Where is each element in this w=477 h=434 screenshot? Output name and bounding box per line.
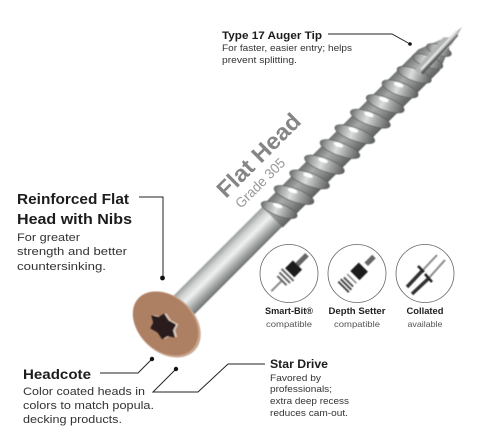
badge: Collated available [396, 244, 454, 329]
caption [265, 306, 313, 329]
rotated label: Flat Head: Flat Head [211, 108, 306, 203]
callout: Star Drive: professionals; [270, 384, 332, 395]
callout: Type 17 Auger Tip: Type 17 Auger Tip [222, 30, 322, 42]
callout: Reinforced Flat Head with Nibs: For greater [17, 232, 80, 244]
callout: Type 17 Auger Tip: For faster, easier entry; helps [222, 43, 353, 53]
callout: Reinforced Flat Head with Nibs: strength and better [17, 246, 127, 258]
icon: smart-bit [260, 244, 318, 302]
caption [328, 306, 386, 329]
callout: Headcote: decking products. [23, 414, 122, 426]
star drive recess [146, 308, 183, 345]
callout: Star Drive: Star Drive [270, 357, 328, 371]
rotated label: Grade 305: Grade 305 [232, 154, 289, 211]
callout: Headcote: colors to match popula. [23, 400, 154, 412]
callout: Star Drive: Favored by [270, 373, 321, 384]
icon: collated screws [396, 244, 454, 302]
badge: Depth Setter compatible [328, 244, 386, 329]
callout: Star Drive: extra deep recess [270, 396, 349, 407]
callout: Headcote [23, 357, 154, 426]
callout: Headcote: Headcote [23, 366, 91, 382]
caption: compatible [266, 319, 312, 329]
callout: Type 17 Auger Tip: prevent splitting. [222, 55, 297, 65]
callout: Star Drive [153, 357, 349, 419]
callout: Star Drive: reduces cam-out. [270, 408, 348, 419]
callout: Reinforced Flat Head with Nibs: countersinking. [17, 261, 106, 273]
caption: compatible [334, 319, 380, 329]
caption: Depth Setter [328, 306, 386, 316]
callout: Reinforced Flat Head with Nibs: Head with Nibs [17, 212, 132, 228]
callout: Type 17 Auger Tip [222, 30, 412, 65]
callout: Reinforced Flat Head with Nibs: Reinforced Flat [17, 192, 129, 208]
screw illustration [120, 11, 477, 371]
caption: Smart-Bit® [265, 306, 313, 316]
callout: Headcote: Color coated heads in [23, 386, 145, 398]
caption [406, 306, 444, 329]
badge: Smart-Bit compatible [260, 244, 318, 329]
icon: depth setter [328, 244, 386, 302]
screw shaft and threads [151, 11, 477, 338]
caption: available [408, 319, 443, 329]
callout: Reinforced Flat Head with Nibs [17, 192, 165, 280]
screw head [120, 278, 214, 371]
caption: Collated [406, 306, 444, 316]
